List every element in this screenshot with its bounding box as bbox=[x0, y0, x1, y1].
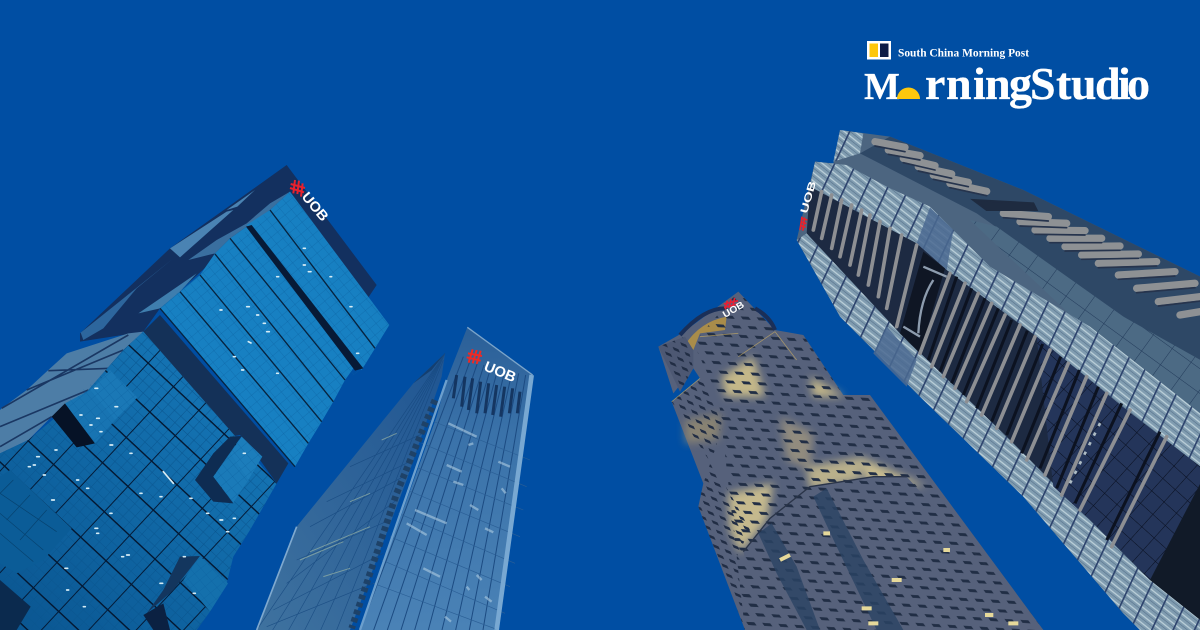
icon: rising sun bbox=[897, 88, 920, 99]
icon: UOB red logo bbox=[800, 217, 807, 231]
louver band bbox=[807, 187, 1200, 620]
sign: UOB left tower: UOB bbox=[299, 189, 332, 224]
upper striped block bbox=[160, 192, 389, 467]
upper light panel band bbox=[810, 162, 1200, 467]
right main face bbox=[360, 327, 533, 630]
dark recessed column bbox=[143, 315, 288, 483]
building: centre tapered tower bbox=[257, 327, 533, 630]
sign: UOB right tower: UOB bbox=[798, 179, 819, 215]
window rows bbox=[658, 292, 1043, 630]
wordmark: MorningStudio bbox=[864, 58, 1150, 109]
icon: UOB red logo bbox=[724, 298, 738, 309]
building: right curved tower bbox=[797, 130, 1200, 630]
sign: UOB stepped tower: UOB bbox=[721, 300, 747, 321]
tower body bbox=[658, 292, 1043, 630]
window reflections bbox=[28, 248, 359, 607]
body and lower panels bbox=[797, 130, 1200, 630]
icon: SCMP box bbox=[867, 41, 891, 60]
sign: UOB centre tower: UOB bbox=[482, 359, 518, 386]
building: stepped grey tower bbox=[658, 292, 1043, 630]
logo: SCMP Morning Studio bbox=[864, 41, 1150, 109]
left wing bbox=[257, 353, 445, 630]
roof planes bbox=[833, 130, 1200, 413]
lower protruding core bbox=[743, 477, 1043, 630]
building: left blue tower bbox=[0, 165, 389, 630]
roof structure bbox=[0, 165, 377, 453]
icon: UOB red logo bbox=[290, 180, 305, 197]
roof slats bbox=[875, 142, 1200, 315]
warm uplight glows bbox=[685, 357, 927, 553]
lower grid facade bbox=[0, 332, 277, 630]
icon: UOB red logo bbox=[467, 349, 482, 364]
publisher name: South China Morning Post bbox=[898, 46, 1029, 60]
